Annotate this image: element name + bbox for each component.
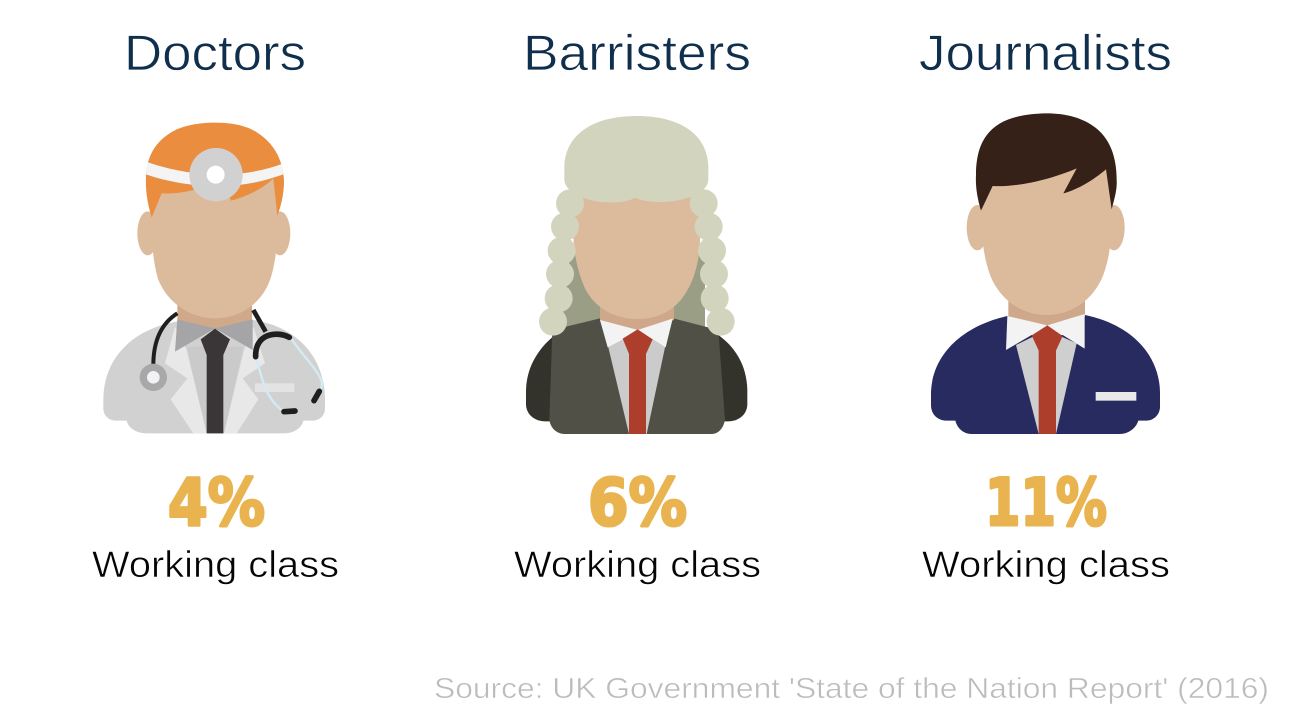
stat: 6%: 6%	[588, 466, 687, 541]
column: journalists	[919, 25, 1172, 585]
heading: Doctors: Doctors	[124, 25, 306, 81]
heading: Barristers: Barristers	[523, 25, 751, 81]
label: working class: Working class	[92, 543, 339, 585]
icon: doctor	[103, 123, 325, 433]
stat: 11%: 11%	[985, 466, 1107, 541]
column: doctors	[92, 25, 339, 585]
label: working class: Working class	[514, 543, 761, 585]
column: barristers	[514, 25, 761, 585]
icon: barrister	[526, 116, 747, 434]
stat: 4%: 4%	[168, 466, 265, 541]
heading: Journalists: Journalists	[919, 25, 1172, 81]
icon: journalist	[931, 113, 1160, 434]
label: working class: Working class	[922, 543, 1170, 585]
source note: Source: UK Government 'State of the Nation Report' (2016)	[434, 673, 1269, 705]
